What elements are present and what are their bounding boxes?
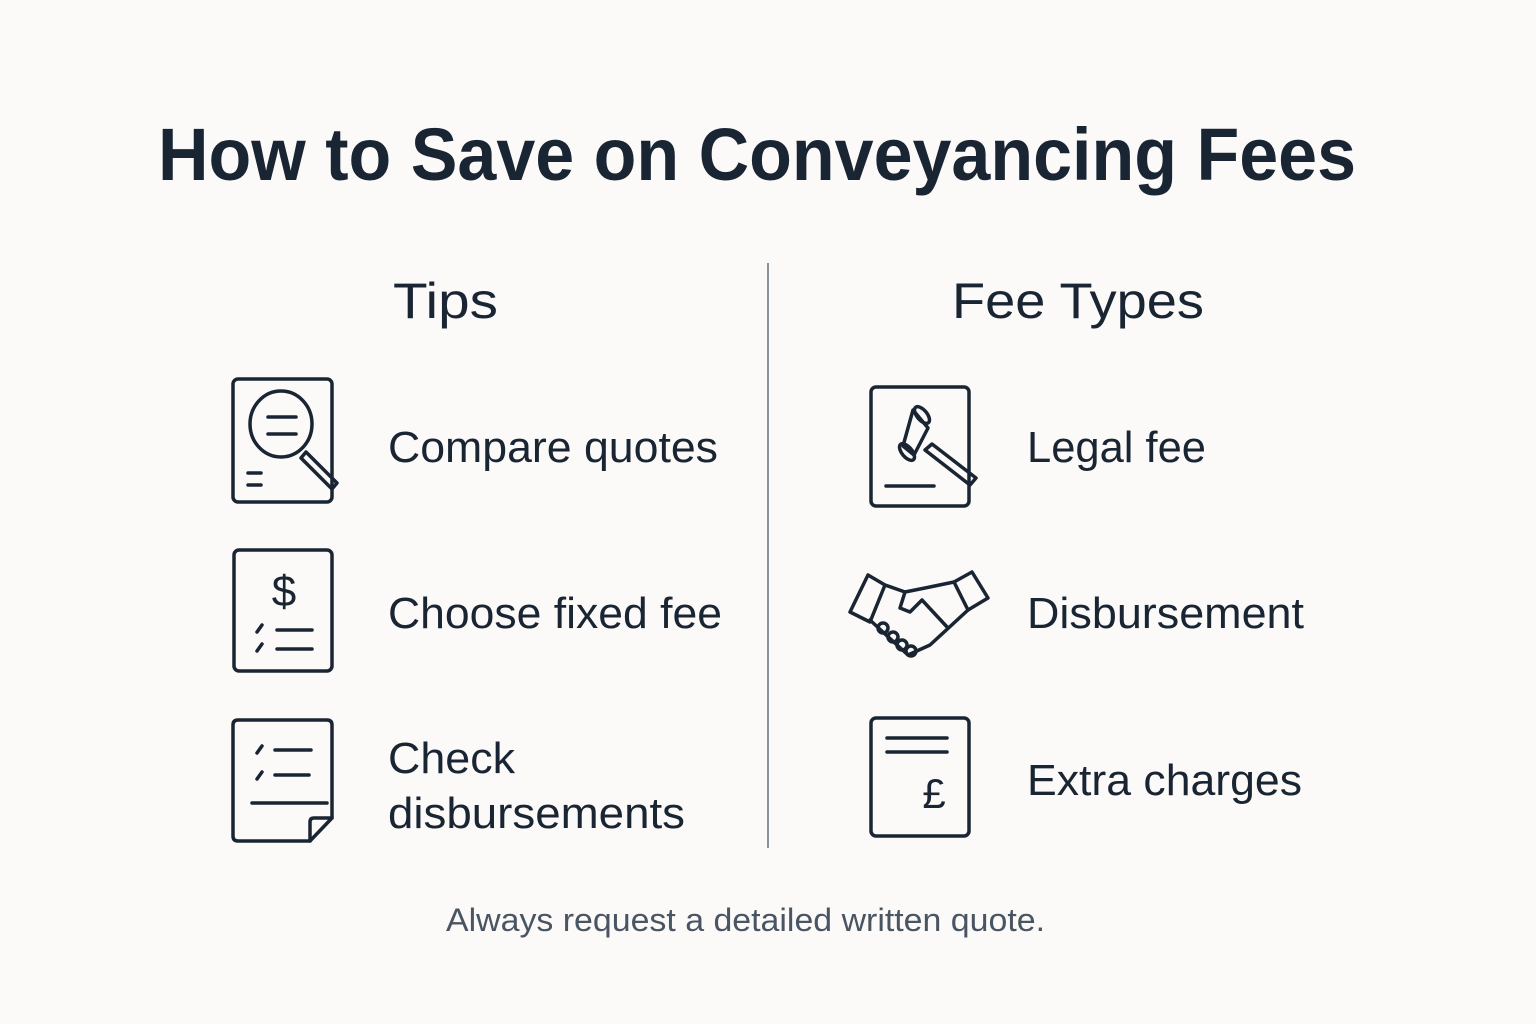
icon: check disbursements: [233, 720, 332, 841]
icon: extra charges: [871, 718, 969, 836]
text: disbursement: Disbursement: [1027, 589, 1304, 638]
text: $: [272, 567, 296, 616]
text: £: [922, 770, 946, 817]
panel: tips: [233, 379, 337, 841]
text: compare quotes: Compare quotes: [388, 423, 718, 472]
title: How to Save on Conveyancing Fees: [158, 113, 1356, 196]
panel: fee types: [850, 387, 988, 836]
text: choose fixed fee: Choose fixed fee: [388, 589, 722, 638]
text: legal fee: Legal fee: [1027, 423, 1206, 472]
text: extra charges: Extra charges: [1027, 756, 1302, 805]
heading: Tips: Tips: [393, 273, 498, 329]
icon: choose fixed fee: [234, 550, 332, 671]
text: check disbursements: disbursements: [388, 789, 685, 838]
icon: compare quotes: [233, 379, 337, 502]
footer note: Always request a detailed written quote.: [446, 902, 1045, 938]
heading: Fee Types: Fee Types: [952, 273, 1204, 329]
icon: legal fee: [871, 387, 976, 506]
text: check disbursements: Check: [388, 734, 516, 783]
icon: handshake: [850, 572, 988, 656]
